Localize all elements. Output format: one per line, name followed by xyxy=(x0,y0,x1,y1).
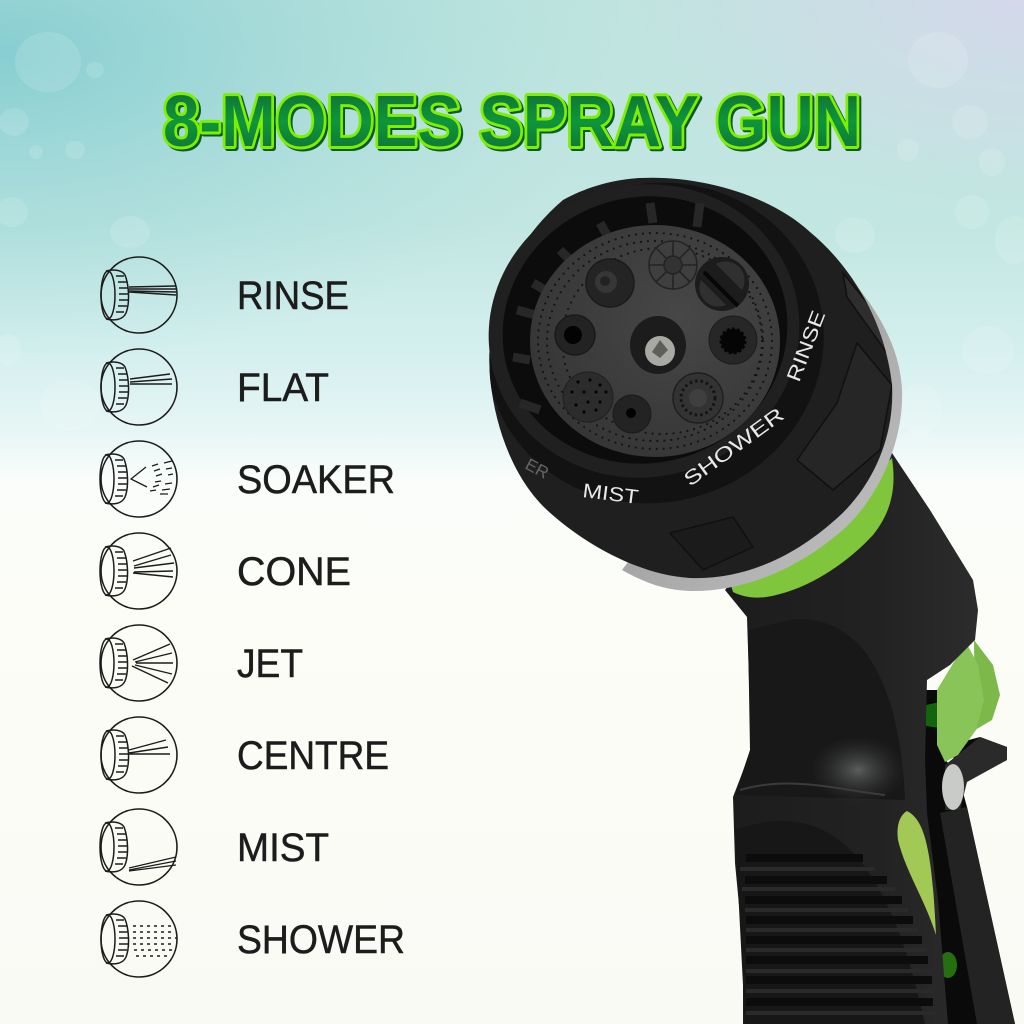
mode: flat xyxy=(101,349,329,425)
nozzle: dotted disc xyxy=(673,373,723,423)
water slots xyxy=(513,203,700,410)
nozzle: shower dome xyxy=(563,372,613,422)
grip ribs xyxy=(745,858,933,1002)
nozzle: small hole xyxy=(613,395,651,433)
mode: cone: CONE xyxy=(237,550,351,594)
housing grip segments xyxy=(489,182,892,571)
nozzle: star xyxy=(709,316,757,364)
mode: shower xyxy=(101,901,405,977)
nozzle: wheel xyxy=(649,241,697,289)
mode: rinse xyxy=(101,257,349,333)
ring labels: SHOWER xyxy=(680,404,788,491)
nozzle: round hole xyxy=(555,315,595,355)
centre screw xyxy=(630,316,686,374)
mode: soaker: SOAKER xyxy=(237,458,395,502)
mode: cone xyxy=(100,533,351,609)
title: 8-MODES SPRAY GUN xyxy=(163,82,861,162)
mode: centre xyxy=(101,717,389,793)
mode: rinse: RINSE xyxy=(237,274,349,318)
mode list xyxy=(100,257,405,977)
nozzle face rim xyxy=(456,150,832,512)
silver ring xyxy=(622,270,902,591)
label band xyxy=(489,182,824,504)
mode: mist: MIST xyxy=(237,826,329,870)
handle shading and highlight xyxy=(735,619,925,1024)
mode: flat: FLAT xyxy=(237,366,329,410)
mode: shower: SHOWER xyxy=(237,918,405,962)
ring labels: MIST xyxy=(581,480,640,509)
nozzle plate xyxy=(530,225,780,457)
green grip accent xyxy=(897,811,936,935)
nozzle housing xyxy=(489,178,892,578)
spray gun xyxy=(488,178,1015,1024)
mode: centre: CENTRE xyxy=(237,734,389,778)
plate dots xyxy=(538,233,772,449)
title: 8-MODES SPRAY GUN xyxy=(165,84,863,164)
ring labels xyxy=(522,308,830,509)
mode: soaker xyxy=(100,441,395,517)
nozzle: rinse jet xyxy=(586,259,634,307)
mode: mist xyxy=(100,809,329,885)
mode: jet: JET xyxy=(237,642,303,686)
nozzle opening xyxy=(472,165,818,495)
ring labels: ER xyxy=(522,455,552,483)
handle xyxy=(725,450,978,1024)
trigger xyxy=(925,640,1015,1024)
nozzle: flat slot xyxy=(695,257,749,311)
green collar xyxy=(728,458,894,598)
mode: jet xyxy=(100,625,303,701)
ring labels: RINSE xyxy=(783,308,830,385)
